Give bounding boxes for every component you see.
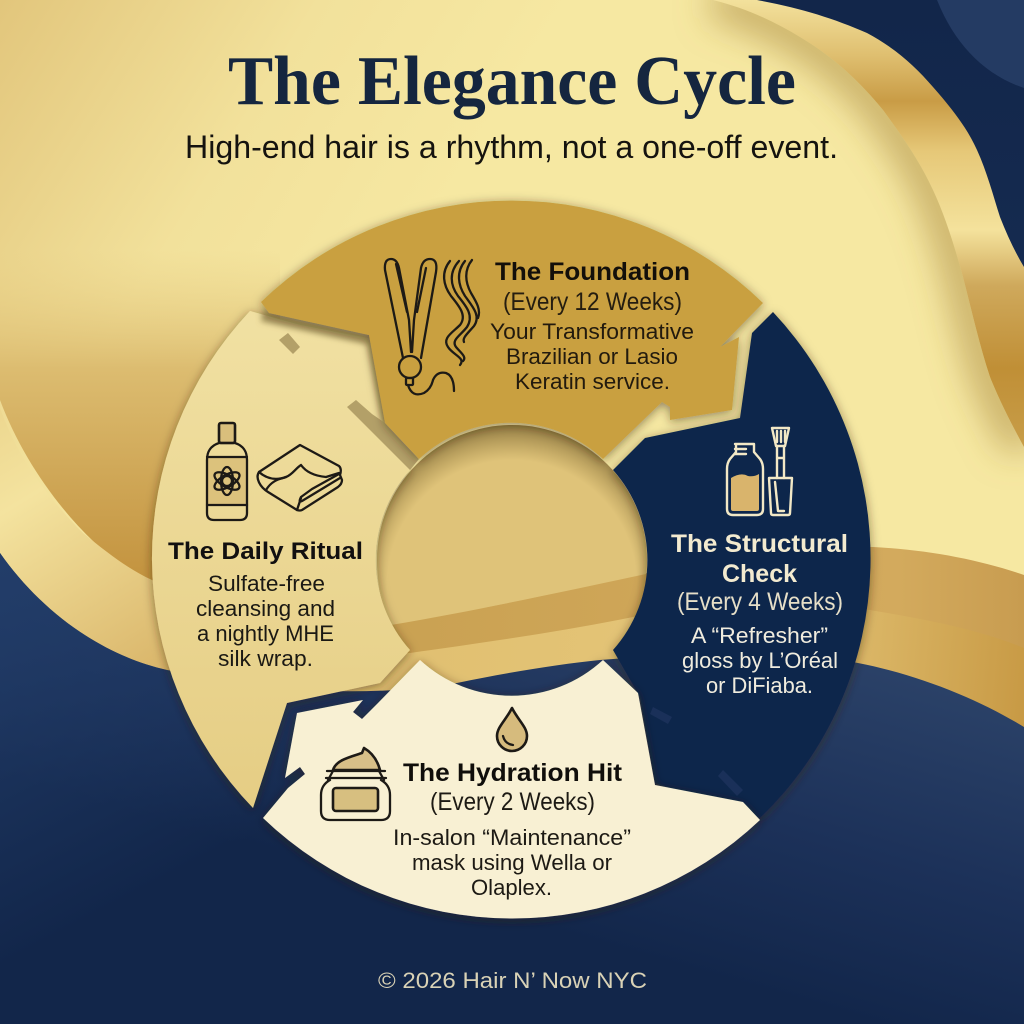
heading: the structural check — [671, 530, 848, 588]
foundation shadow on daily panel — [262, 316, 388, 426]
text: hydration description: In-salon “Maintenance” — [393, 825, 631, 850]
text: foundation description: Brazilian or Lasio — [506, 344, 678, 369]
text: foundation description — [490, 319, 694, 394]
icon: cream jar — [321, 748, 390, 820]
text: daily ritual description — [196, 571, 335, 671]
icon: shampoo bottle — [207, 423, 247, 520]
text: structural description: gloss by L’Oréal — [682, 648, 838, 673]
text: structural frequency: (Every 4 Weeks) — [677, 588, 843, 616]
text: hydration description — [393, 825, 631, 900]
text: hydration description: Olaplex. — [471, 875, 552, 900]
text: daily ritual description: Sulfate-free — [208, 571, 325, 596]
heading: the hydration hit: The Hydration Hit — [403, 759, 623, 787]
centre hole of the ring — [377, 425, 647, 625]
text: hydration frequency: (Every 2 Weeks) — [430, 788, 595, 816]
notch accents on structural panel — [650, 707, 743, 796]
panel: the foundation — [261, 201, 763, 459]
icon: flat iron and hair waves — [385, 259, 479, 394]
heading: the structural check: Check — [722, 560, 797, 588]
text: structural description — [682, 623, 838, 698]
text: hydration description: mask using Wella or — [412, 850, 612, 875]
heading: the structural check: The Structural — [671, 530, 848, 558]
subtitle: High-end hair is a rhythm, not a one-off event. — [185, 129, 838, 165]
text: daily ritual description: a nightly MHE — [197, 621, 334, 646]
text: foundation frequency: (Every 12 Weeks) — [503, 288, 682, 316]
icon: folded towel — [258, 445, 342, 510]
notch accents on daily panel — [279, 333, 419, 470]
icon: water drop — [497, 708, 527, 751]
text: daily ritual description: cleansing and — [196, 596, 335, 621]
title: The Elegance Cycle — [228, 43, 796, 120]
icon: gloss bottle and brush — [727, 428, 792, 515]
panel: the structural check — [613, 312, 871, 818]
text: structural description: or DiFiaba. — [706, 673, 813, 698]
text: structural description: A “Refresher” — [691, 623, 828, 648]
footer: © 2026 Hair N’ Now NYC — [378, 968, 647, 993]
heading: the daily ritual: The Daily Ritual — [168, 538, 363, 565]
panel: the daily ritual — [152, 311, 419, 808]
heading: the foundation: The Foundation — [495, 258, 690, 286]
text: foundation description: Keratin service. — [515, 369, 670, 394]
text: daily ritual description: silk wrap. — [218, 646, 313, 671]
panel: the hydration hit — [263, 660, 760, 919]
text: foundation description: Your Transformative — [490, 319, 694, 344]
